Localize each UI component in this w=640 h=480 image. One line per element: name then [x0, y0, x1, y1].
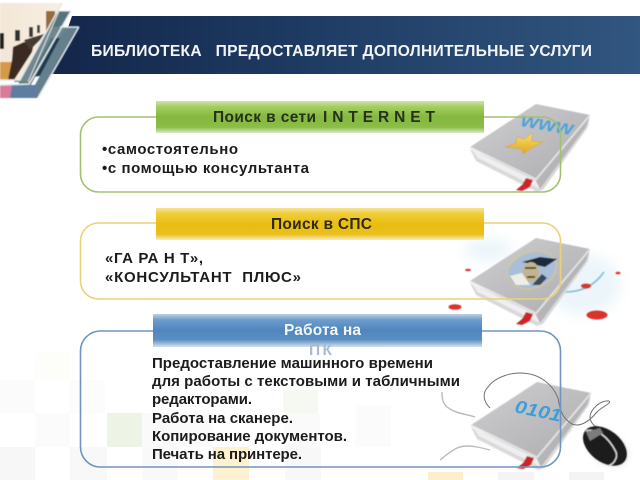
panel: computer work: [80, 314, 560, 467]
banner: computer work: [153, 314, 482, 359]
panel: legal systems search: [80, 208, 560, 299]
red drops: [448, 269, 620, 320]
icon: 0101: 0101: [513, 396, 563, 426]
banner: computer work: ПК: [309, 342, 333, 359]
text: legal systems: «КОНСУЛЬТАНТ ПЛЮС»: [105, 269, 301, 286]
text: internet list: •самостоятельно: [102, 141, 238, 158]
portrait medallion: [503, 245, 561, 295]
text: computer services: Работа на сканере.: [152, 410, 293, 427]
cable: [440, 373, 610, 460]
banner: legal systems search: [156, 208, 484, 240]
title: БИБЛИОТЕКА ПРЕДОСТАВЛЯЕТ ДОПОЛНИТЕЛЬНЫЕ УСЛУГИ: [91, 43, 592, 60]
banner: internet search: [156, 101, 484, 133]
text: internet list: •с помощью консультанта: [102, 160, 310, 177]
text: computer services: [152, 355, 460, 463]
header band: [52, 16, 640, 74]
book 3 with cable and mouse: [440, 373, 636, 475]
banner: computer work: Работа на: [284, 322, 361, 339]
text: computer services: Предоставление машинного времени: [152, 355, 433, 372]
text: legal systems: «ГА РА Н Т»,: [105, 250, 203, 267]
book 1: [470, 104, 590, 192]
book 2 with splash: [448, 238, 620, 326]
icon: star: [505, 133, 543, 154]
text: computer services: Печать на принтере.: [152, 446, 302, 463]
banner: internet search: Поиск в сети: [213, 109, 316, 126]
header photo collage: [0, 3, 79, 98]
text: legal systems: [105, 250, 301, 286]
text: computer services: для работы с текстовыми и табличными: [152, 373, 460, 390]
text: internet list: [102, 141, 310, 177]
text: computer services: редакторами.: [152, 391, 252, 408]
background checker pattern: [0, 353, 604, 480]
banner: internet search: I N T E R N E T: [323, 109, 436, 126]
text: computer services: Копирование документов.: [152, 428, 347, 445]
banner: legal systems search: Поиск в СПС: [271, 216, 372, 233]
icon: www: www: [519, 109, 577, 140]
icon: mouse: [575, 418, 636, 475]
panel: internet search: [80, 101, 560, 192]
